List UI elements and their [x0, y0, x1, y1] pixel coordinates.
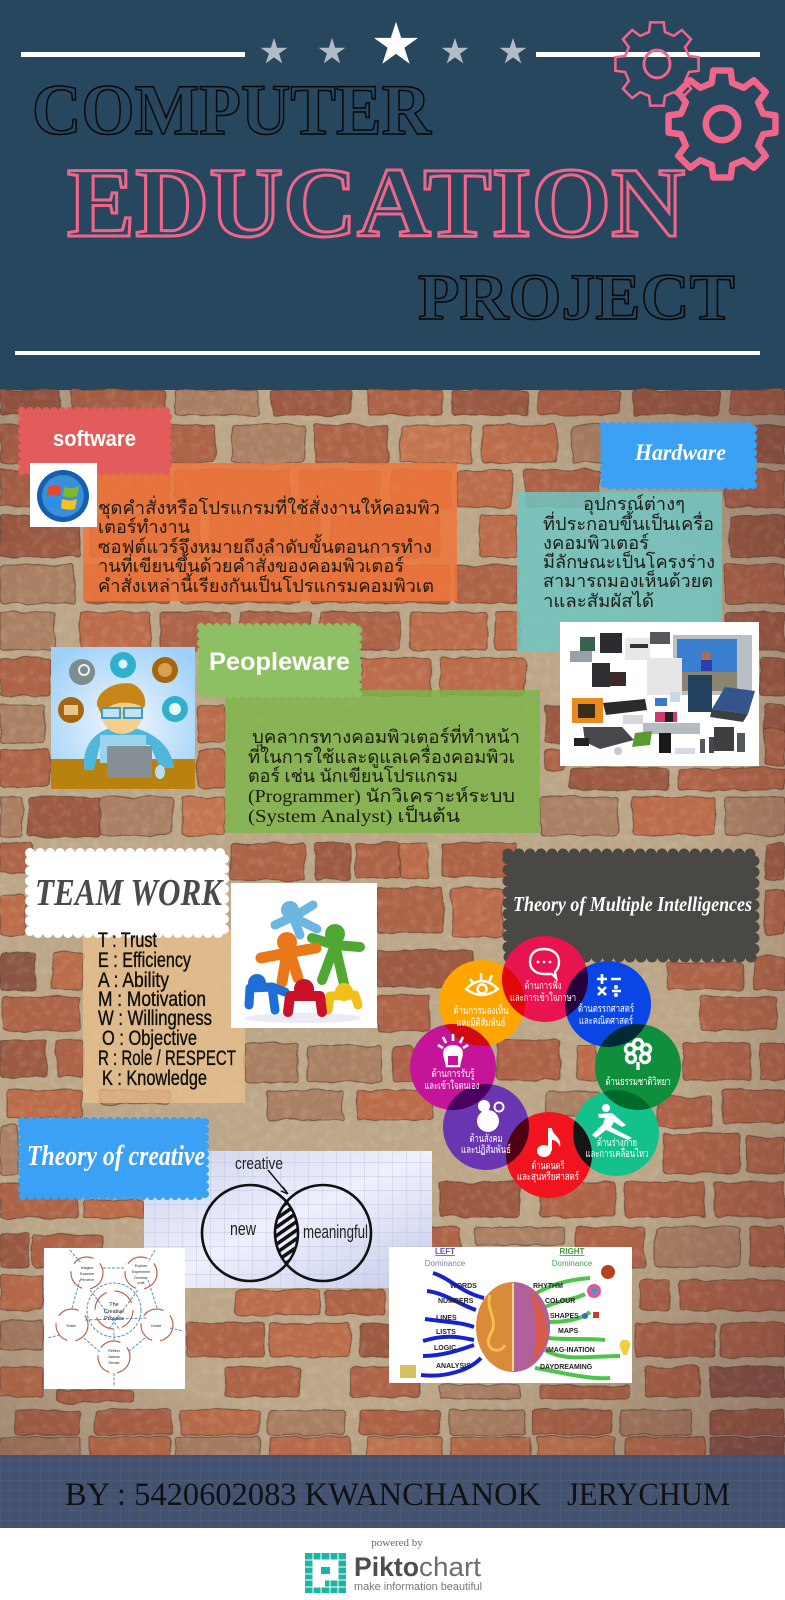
- panel: software text background: [83, 463, 457, 601]
- icon: runner: [592, 1104, 632, 1140]
- icon: piktochart logo: [305, 1553, 346, 1593]
- text: team work acronym list: T : Trust: [98, 929, 157, 952]
- label: Peopleware: [201, 627, 358, 694]
- image: left and right brain dominance: LISTS: [436, 1329, 456, 1336]
- stars row: [261, 22, 526, 64]
- text: bodily: ด้านร่างกาย: [597, 1137, 637, 1149]
- image: left and right brain dominance: IMAG-INATION: [546, 1347, 595, 1354]
- text: piktochart wordmark: [354, 1552, 482, 1593]
- text: software description: ชุดคำสั่งหรือโปรแกรมที่ใช้สั่งงานให้คอมพิว: [98, 495, 440, 519]
- label: Hardware: [604, 426, 753, 486]
- text: hardware description: อุปกรณ์ต่างๆ: [583, 494, 685, 515]
- header rule: top right: [536, 52, 760, 57]
- image: creative process diagram: Revise: [108, 1361, 120, 1365]
- image: creative process diagram: Creative: [104, 1309, 124, 1315]
- text: visual spatial: [454, 1003, 508, 1029]
- label: Theory of creative: Theory of creative: [27, 1141, 205, 1172]
- text: peopleware description: [248, 724, 520, 827]
- text: linguistic: [510, 980, 576, 1004]
- text: logical: ด้านตรรกศาสตร์: [578, 1002, 634, 1015]
- image: left and right brain dominance: COLOUR: [545, 1298, 575, 1305]
- text: bodily: และการเคลื่อนไหว: [586, 1146, 649, 1160]
- text: logical: [578, 1002, 634, 1027]
- text: author credit: BY : 5420602083 KWANCHANOK: [65, 1477, 541, 1513]
- image: left and right brain dominance: WORDS: [450, 1283, 477, 1290]
- title: COMPUTER: COMPUTER: [32, 70, 432, 150]
- label: Peopleware: Peopleware: [209, 648, 350, 676]
- image: creative venn diagram: new: [230, 1219, 257, 1239]
- title: EDUCATION: EDUCATION: [67, 147, 685, 258]
- image: left and right brain dominance: LEFT: [435, 1247, 455, 1256]
- icon: eye: [466, 973, 498, 995]
- label: Theory of Multiple Intelligences: [508, 854, 754, 957]
- text: interpersonal: และปฏิสัมพันธ์: [461, 1143, 511, 1156]
- text: interpersonal: ด้านสังคม: [470, 1133, 502, 1145]
- text: software description: คำสั่งเหล่านี้เรียงกันเป็นโปรแกรมคอมพิวเต: [98, 573, 434, 596]
- text: visual spatial: ด้านการมองเห็น: [454, 1003, 508, 1017]
- image: left and right brain dominance: ANALYSIS: [436, 1363, 471, 1370]
- text: author credit: JERYCHUM: [567, 1477, 730, 1513]
- image: creative process diagram: The: [109, 1302, 119, 1308]
- text: hardware description: มีลักษณะเป็นโครงร่าง: [543, 550, 715, 572]
- image: left and right brain dominance: Dominance: [425, 1259, 466, 1268]
- text: hardware description: ที่ประกอบขึ้นเป็นเครื่อ: [543, 511, 714, 534]
- image: creative process diagram: craft: [138, 1281, 144, 1285]
- icon: people: [477, 1100, 504, 1132]
- image: left and right brain dominance: RHYTHM: [533, 1283, 563, 1290]
- image: computer hardware collection: [560, 622, 759, 766]
- image: creative process diagram: Assess: [108, 1355, 120, 1359]
- label: TEAM WORK: [30, 853, 224, 933]
- text: linguistic: ด้านการฟัง: [524, 980, 562, 992]
- image: left and right brain dominance: NUMBERS: [438, 1298, 474, 1305]
- image: creative process diagram: Reflect: [108, 1349, 120, 1353]
- text: software description: เตอร์ทำงาน: [98, 517, 190, 537]
- text: intrapersonal: ด้านการรับรู้: [432, 1068, 475, 1080]
- image: creative process diagram: [44, 1248, 185, 1389]
- text: software description: านที่เขียนขึ้นด้วยคำสั่งของคอมพิวเตอร์: [98, 553, 404, 576]
- label: Theory of creative: [22, 1121, 205, 1196]
- text: piktochart wordmark: make information beautiful: [354, 1581, 482, 1593]
- text: logical: และคณิตศาสตร์: [579, 1014, 633, 1027]
- panel: hardware text background: [517, 492, 722, 652]
- text: interpersonal: [461, 1133, 511, 1156]
- text: software description: [98, 495, 440, 596]
- image: left and right brain dominance: [389, 1247, 632, 1383]
- image: creative venn diagram: meaningful: [303, 1222, 368, 1242]
- text: team work acronym list: M : Motivation: [98, 988, 206, 1011]
- text: intrapersonal: และเข้าใจตนเอง: [424, 1079, 480, 1092]
- text: musical: และสุนทรียศาสตร์: [517, 1170, 579, 1183]
- text: hardware description: าและสัมผัสได้: [543, 590, 654, 611]
- image: left and right brain dominance: LINES: [436, 1315, 457, 1322]
- label: software: software: [53, 426, 136, 451]
- text: musical: [517, 1159, 579, 1183]
- image: creative process diagram: Develop: [134, 1276, 148, 1280]
- text: linguistic: และการเข้าใจภาษา: [510, 991, 576, 1004]
- image: left and right brain dominance: RIGHT: [560, 1247, 585, 1256]
- icon: large gear: [669, 71, 775, 177]
- icon: windows logo: [30, 463, 97, 527]
- text: team work acronym list: K : Knowledge: [102, 1067, 207, 1090]
- header rule: bottom: [15, 351, 760, 355]
- text: naturalist: ด้านธรรมชาติวิทยา: [606, 1076, 670, 1088]
- text: musical: ด้านดนตรี: [532, 1159, 565, 1172]
- chart: multiple intelligences ring: [410, 936, 681, 1198]
- brick wall background: [0, 390, 785, 1457]
- text: hardware description: งคอมพิวเตอร์: [543, 533, 649, 553]
- text: software description: ซอฟต์แวร์จึงหมายถึงลำดับขั้นตอนการทำง: [98, 534, 432, 557]
- text: piktochart wordmark: chart: [419, 1552, 482, 1582]
- image: creative process diagram: Examine: [80, 1272, 94, 1276]
- image: creative process diagram: Experiment: [132, 1270, 150, 1274]
- text: team work acronym list: W : Willingness: [98, 1007, 212, 1030]
- icon: flower: [626, 1040, 650, 1070]
- label: Hardware: Hardware: [634, 440, 726, 465]
- label: software: [22, 411, 168, 471]
- text: visual spatial: และมิติสัมพันธ์: [456, 1016, 506, 1029]
- text: intrapersonal: [424, 1068, 480, 1092]
- header rule: top left: [21, 52, 245, 57]
- text: piktochart wordmark: Pikto: [354, 1552, 419, 1582]
- text: team work acronym list: O : Objective: [102, 1027, 197, 1050]
- image: creative process diagram: Create: [151, 1324, 161, 1328]
- label: Theory of Multiple Intelligences: Theory of Multiple Intelligences: [513, 892, 752, 916]
- text: team work acronym list: A : Ability: [98, 969, 169, 992]
- image: creative process diagram: Process: [104, 1316, 124, 1322]
- icon: speech bubble: [530, 949, 559, 978]
- image: left and right brain dominance: MAPS: [558, 1328, 579, 1335]
- image: creative process diagram: Share: [66, 1324, 76, 1328]
- image: left and right brain dominance: Dominance: [552, 1259, 593, 1268]
- footer band: [0, 1455, 785, 1528]
- text: team work acronym list: E : Efficiency: [98, 949, 191, 972]
- icon: math symbols: [597, 974, 621, 996]
- image: left and right brain dominance: LOGIC: [434, 1345, 456, 1352]
- image: left and right brain dominance: DAYDREAMING: [540, 1364, 593, 1371]
- footer white strip: [0, 1528, 785, 1600]
- text: peopleware description: (Programmer) นักวิเคราะห์ระบบ: [248, 786, 515, 807]
- panel: peopleware text background: [225, 690, 540, 833]
- text: peopleware description: ที่ในการใช้และดูแลเครื่องคอมพิวเ: [248, 744, 515, 768]
- panel: team work list background: [83, 930, 245, 1103]
- text: hardware description: สามารถมองเห็นด้วยต: [543, 569, 713, 591]
- title: PROJECT: PROJECT: [418, 261, 735, 334]
- illustration: person at laptop: [51, 647, 195, 789]
- text: peopleware description: ตอร์ เช่น นักเขียนโปรแกรม: [248, 765, 458, 786]
- image: creative process diagram: Imagine: [81, 1266, 93, 1270]
- icon: light bulb: [438, 1034, 468, 1066]
- image: creative process diagram: Explore: [135, 1264, 147, 1268]
- header background: [0, 0, 785, 390]
- image: creative process diagram: Perceive: [80, 1278, 94, 1282]
- text: peopleware description: บุคลากรทางคอมพิวเตอร์ที่ทำหน้า: [252, 724, 520, 748]
- text: team work acronym list: [98, 929, 236, 1090]
- image: teamwork figures: [231, 883, 377, 1028]
- icon: small gear: [615, 22, 699, 106]
- text: peopleware description: (System Analyst) เป็นต้น: [248, 804, 460, 827]
- text: powered by: powered by: [371, 1537, 423, 1549]
- label: TEAM WORK: TEAM WORK: [35, 872, 224, 914]
- image: creative venn diagram: [144, 1151, 432, 1288]
- text: team work acronym list: R : Role / RESPECT: [98, 1047, 236, 1070]
- text: hardware description: [543, 494, 715, 611]
- icon: music note: [537, 1128, 560, 1157]
- text: bodily: [586, 1137, 649, 1160]
- image: left and right brain dominance: SHAPES: [550, 1313, 579, 1320]
- image: creative venn diagram: creative: [235, 1154, 283, 1173]
